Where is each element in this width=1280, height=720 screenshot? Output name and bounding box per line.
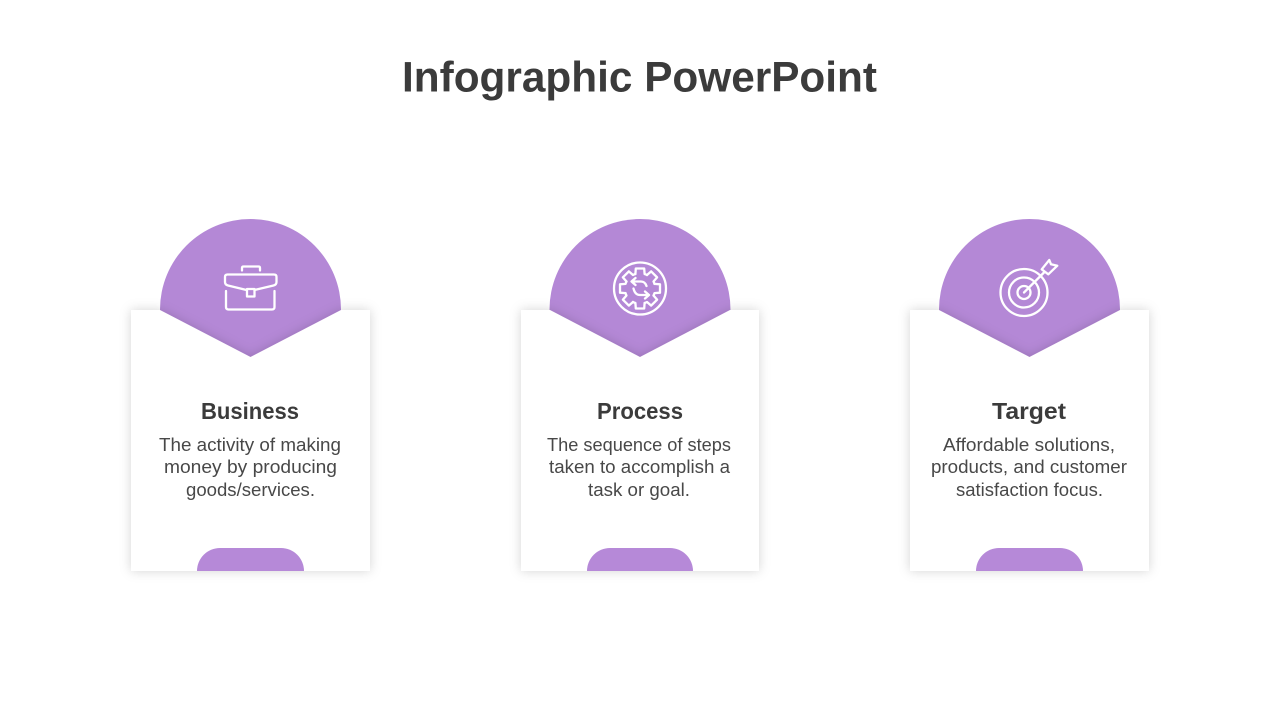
purple circle (939, 219, 1120, 400)
heading: business: Business (201, 398, 299, 424)
text: process description: task or goal. (588, 480, 690, 500)
text: business description: goods/services. (186, 480, 315, 500)
notched card (910, 310, 1149, 571)
icon: gear with arrows (614, 262, 666, 314)
panel: business (131, 219, 370, 571)
text: target description: satisfaction focus. (956, 480, 1103, 500)
text: process description: The sequence of steps (547, 435, 731, 455)
text: business description (159, 435, 341, 500)
text: target description: products, and customer (931, 457, 1127, 477)
icon: briefcase (225, 266, 276, 310)
heading: process: Process (597, 398, 683, 424)
tab: purple pill (587, 548, 693, 571)
title: Infographic PowerPoint (402, 54, 877, 102)
tab: purple pill (976, 548, 1083, 571)
heading: target: Target (992, 398, 1066, 424)
tab: purple pill (197, 548, 304, 571)
text: target description (931, 435, 1127, 500)
text: target description: Affordable solutions, (943, 435, 1115, 455)
notched card (131, 310, 370, 571)
notched card (521, 310, 759, 571)
text: process description (547, 435, 731, 500)
text: business description: The activity of making (159, 435, 341, 455)
text: process description: taken to accomplish a (549, 457, 731, 477)
panel: process (521, 219, 759, 571)
purple circle (550, 219, 730, 400)
text: business description: money by producing (164, 457, 337, 477)
icon: target with arrow (1000, 260, 1057, 316)
purple circle (160, 219, 341, 400)
panel: target (910, 219, 1149, 571)
